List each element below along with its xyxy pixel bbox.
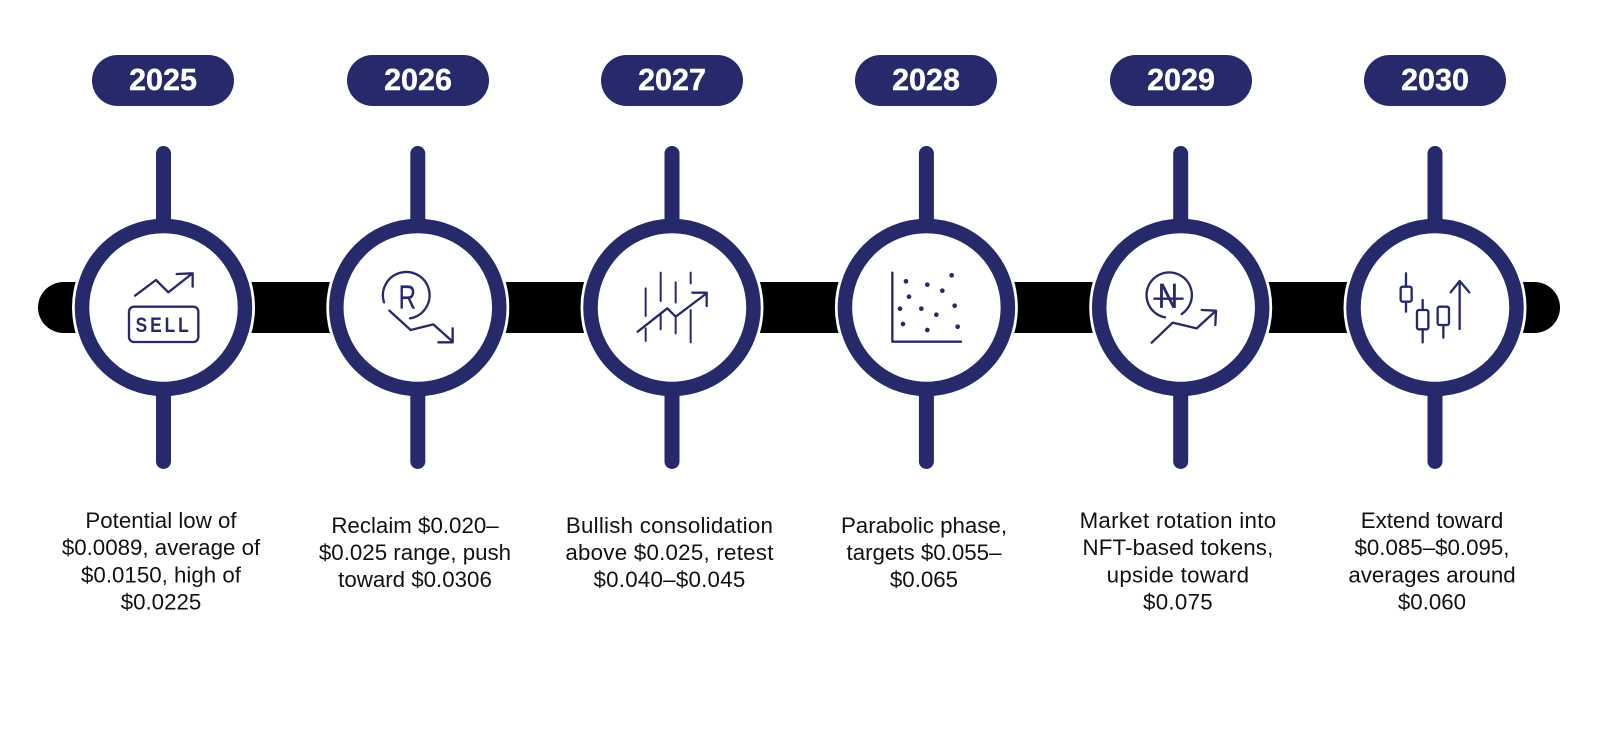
ring and stems 2028 bbox=[835, 154, 1018, 462]
year pill 2025 bbox=[92, 55, 234, 106]
year pill 2025: 2025 bbox=[129, 63, 197, 97]
description 2025: $0.0089, average of bbox=[62, 535, 261, 560]
year pill 2026 bbox=[347, 55, 489, 106]
description 2027: Bullish consolidation bbox=[566, 513, 773, 538]
icon: candlesticks with up arrow bbox=[1401, 273, 1469, 342]
year pill 2026: 2026 bbox=[384, 63, 452, 97]
icon: R coin with falling arrow bbox=[383, 272, 453, 342]
description 2028: $0.065 bbox=[890, 567, 958, 592]
milestone 2027 bbox=[565, 55, 774, 592]
year pill 2027 bbox=[601, 55, 743, 106]
timeline bar bbox=[38, 282, 1560, 333]
ring and stems 2027 bbox=[580, 154, 764, 462]
year pill 2028 bbox=[855, 55, 997, 106]
ring and stems 2026 bbox=[326, 154, 509, 462]
milestone 2030 bbox=[1344, 55, 1526, 614]
description 2029: NFT-based tokens, bbox=[1083, 535, 1273, 560]
icon: sell sign with rising arrow bbox=[129, 273, 198, 342]
description 2026: $0.025 range, push bbox=[319, 540, 511, 565]
description 2026: toward $0.0306 bbox=[338, 567, 492, 592]
icon: bar lines with rising arrow bbox=[638, 273, 707, 342]
description 2026: Reclaim $0.020– bbox=[331, 513, 499, 538]
description 2029: upside toward bbox=[1107, 562, 1249, 588]
description 2025: $0.0225 bbox=[121, 590, 201, 614]
icon: scatter plot bbox=[892, 273, 961, 342]
ring and stems 2025 bbox=[72, 154, 255, 462]
description 2029: $0.075 bbox=[1143, 590, 1213, 614]
year pill 2029 bbox=[1110, 55, 1252, 106]
ring and stems 2030 bbox=[1344, 154, 1526, 462]
description 2030: $0.085–$0.095, bbox=[1354, 535, 1510, 560]
year pill 2027: 2027 bbox=[638, 63, 706, 97]
year pill 2028: 2028 bbox=[892, 63, 960, 97]
description 2028: targets $0.055– bbox=[847, 540, 1002, 565]
description 2030: averages around bbox=[1348, 562, 1516, 588]
milestone 2025 bbox=[62, 55, 261, 614]
description 2030: Extend toward bbox=[1361, 508, 1503, 533]
description 2027: above $0.025, retest bbox=[565, 540, 774, 565]
description 2025: $0.0150, high of bbox=[81, 562, 242, 588]
milestone 2026 bbox=[319, 55, 511, 592]
icon: naira coin with rising arrow: N bbox=[1158, 276, 1178, 315]
icon: sell sign with rising arrow: SELL bbox=[136, 313, 192, 338]
year pill 2030: 2030 bbox=[1401, 63, 1469, 97]
year pill 2029: 2029 bbox=[1147, 63, 1215, 97]
milestone 2029 bbox=[1080, 55, 1276, 614]
year pill 2030 bbox=[1364, 55, 1506, 106]
description 2029: Market rotation into bbox=[1080, 508, 1276, 533]
description 2028: Parabolic phase, bbox=[841, 513, 1007, 538]
icon: R coin with falling arrow: R bbox=[399, 280, 416, 316]
description 2030: $0.060 bbox=[1398, 590, 1466, 614]
description 2025: Potential low of bbox=[85, 508, 237, 533]
ring and stems 2029 bbox=[1089, 154, 1272, 462]
milestone 2028 bbox=[835, 55, 1018, 592]
icon: naira coin with rising arrow bbox=[1147, 272, 1216, 343]
description 2027: $0.040–$0.045 bbox=[593, 567, 746, 592]
